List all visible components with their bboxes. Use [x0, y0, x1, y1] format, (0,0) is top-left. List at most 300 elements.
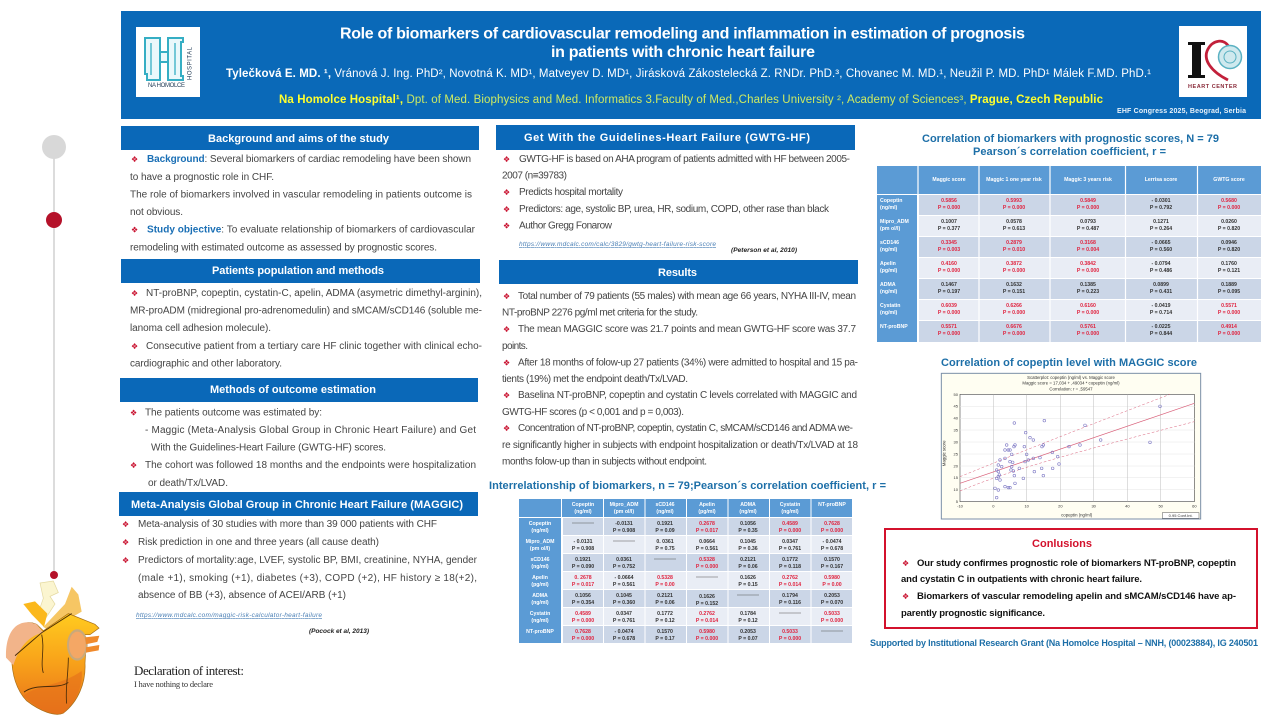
panel: results: ❖ [503, 325, 510, 334]
table: interrelationship of biomarkers: P = 0.118 [779, 564, 801, 570]
heading: results: Results [658, 267, 697, 279]
table: interrelationship of biomarkers: P = 0.00 [822, 582, 842, 588]
heading: correlation with prognostic scores: Pearson´s correlation coefficient, r = [973, 146, 1166, 158]
panel: MAGGIC: (Pocock et al, 2013) [309, 628, 369, 635]
table: interrelationship of biomarkers: P = 0.090 [572, 564, 594, 570]
table: biomarkers vs prognostic scores: - 0.0665 [1151, 240, 1171, 246]
table: biomarkers vs prognostic scores: Apelin [880, 261, 896, 267]
table: interrelationship of biomarkers: - 0.0131 [573, 539, 593, 545]
table: interrelationship of biomarkers: P = 0.09 [655, 528, 675, 534]
table: interrelationship of biomarkers: P = 0.360 [613, 600, 635, 606]
panel: patients population and methods: ❖ [131, 342, 138, 351]
table: biomarkers vs prognostic scores: P = 0.487 [1077, 226, 1099, 232]
title: in patients with chronic heart failure [551, 44, 815, 61]
table: interrelationship of biomarkers: (ng/ml) [531, 618, 549, 624]
table: biomarkers vs prognostic scores [877, 166, 1261, 342]
table: interrelationship of biomarkers: P = 0.15 [738, 582, 758, 588]
table: interrelationship of biomarkers: P = 0.908 [613, 528, 635, 534]
table: interrelationship of biomarkers: P = 0.06 [738, 564, 758, 570]
table: interrelationship of biomarkers: sCD146 [530, 557, 550, 563]
table: interrelationship of biomarkers: P = 0.017 [572, 582, 594, 588]
table: biomarkers vs prognostic scores: P = 0.197 [938, 289, 960, 295]
table: interrelationship of biomarkers: 0.5328 [657, 575, 673, 581]
heading: interrelationship of biomarkers: Interrelationship of biomarkers, n = 79;Pearson´s correlation coefficient, r = [489, 480, 886, 492]
panel: conclusions: Conlusions [1032, 538, 1092, 550]
table: biomarkers vs prognostic scores: Lerrisa score [1145, 177, 1177, 183]
table: interrelationship of biomarkers: ADMA [532, 593, 548, 599]
table: biomarkers vs prognostic scores: P = 0.000 [1218, 331, 1240, 337]
table: biomarkers vs prognostic scores: 0.5849 [1080, 198, 1096, 204]
table: interrelationship of biomarkers: 0. 0361 [656, 539, 674, 545]
table: interrelationship of biomarkers: P = 0.678 [821, 546, 843, 552]
table: interrelationship of biomarkers: 0.1056 [740, 521, 756, 527]
table: interrelationship of biomarkers: P = 0.561 [696, 546, 718, 552]
panel: results: ❖ [503, 358, 510, 368]
panel: background and aims: not obvious. [130, 207, 183, 218]
table: biomarkers vs prognostic scores: 0.1385 [1080, 282, 1096, 288]
table: biomarkers vs prognostic scores: 0.5571 [941, 324, 957, 330]
table: biomarkers vs prognostic scores: 0.3168 [1080, 240, 1096, 246]
table: interrelationship of biomarkers: Cystatin [780, 502, 800, 508]
table: biomarkers vs prognostic scores: P = 0.820 [1218, 226, 1240, 232]
heading: correlation with prognostic scores [922, 133, 1219, 158]
scatter plot: 20 [1058, 504, 1063, 509]
scatter plot: Maggic score [942, 440, 947, 466]
table: interrelationship of biomarkers: sCD146 [655, 502, 675, 508]
table: interrelationship of biomarkers: (pm ol/l) [614, 509, 634, 515]
table: biomarkers vs prognostic scores: 0.6676 [1006, 324, 1022, 330]
scatter plot [940, 372, 1202, 520]
title [340, 26, 1025, 61]
table: biomarkers vs prognostic scores: 0.1007 [941, 219, 957, 225]
scatter plot: copeptin (ng/ml) [1061, 512, 1093, 517]
panel: results: After 18 months of folow-up 27 patients (34%) were admitted to hospital and 15 pa- [518, 358, 858, 368]
heading: methods: Methods of outcome estimation [210, 384, 376, 396]
scatter plot: 0.95 Conf.Int. [1169, 513, 1193, 518]
table: biomarkers vs prognostic scores: P = 0.151 [1003, 289, 1025, 295]
table: interrelationship of biomarkers: (ng/ml) [656, 509, 674, 515]
table: biomarkers vs prognostic scores: sCD146 [880, 240, 899, 246]
table: biomarkers vs prognostic scores: P = 0.095 [1218, 289, 1240, 295]
panel: conclusions [885, 529, 1257, 628]
table: biomarkers vs prognostic scores: Maggic 3 years risk [1064, 177, 1112, 183]
icon: anatomical heart [6, 580, 100, 715]
table: interrelationship of biomarkers: P = 0.00 [655, 582, 675, 588]
scatter plot: 10 [954, 487, 959, 492]
table: biomarkers vs prognostic scores: 0.6266 [1006, 303, 1022, 309]
logo: Na Homolce Hospital [136, 27, 200, 97]
panel: conclusions: and cystatin C in outpatients with chronic heart failure. [901, 574, 1142, 585]
table: interrelationship of biomarkers: 0.5328 [699, 557, 715, 563]
heading: copeptin vs MAGGIC: Correlation of copeptin level with MAGGIC score [941, 357, 1197, 369]
panel: results: The mean MAGGIC score was 21.7 points and mean GWTG-HF score was 37.7 [518, 324, 856, 335]
table: interrelationship of biomarkers: P = 0.678 [613, 636, 635, 642]
scatter plot: 30 [954, 439, 959, 444]
table: interrelationship of biomarkers: Copeptin [572, 502, 594, 508]
table: interrelationship of biomarkers: (ng/ml) [531, 600, 549, 606]
declaration of interest [134, 663, 244, 689]
table: interrelationship of biomarkers: P = 0.354 [572, 600, 594, 606]
heading: results [499, 260, 858, 284]
heading: GWTG: Get With the Guidelines-Heart Failure (GWTG-HF) [524, 132, 810, 144]
table: biomarkers vs prognostic scores: - 0.0225 [1151, 324, 1171, 330]
table: biomarkers vs prognostic scores: 0.5761 [1080, 324, 1096, 330]
logo: Heart Center [1179, 26, 1247, 97]
table: biomarkers vs prognostic scores: P = 0.377 [938, 226, 960, 232]
table: interrelationship of biomarkers: 0.1784 [740, 611, 756, 617]
table: interrelationship of biomarkers: P = 0.152 [696, 601, 718, 607]
table: biomarkers vs prognostic scores: P = 0.000 [1003, 310, 1025, 316]
table: interrelationship of biomarkers: P = 0.014 [779, 582, 801, 588]
panel: results: Baselina NT-proBNP, copeptin and cystatin C levels correlated with MAGGIC and [518, 390, 857, 401]
table: interrelationship of biomarkers: (ng/ml) [531, 528, 549, 534]
panel: MAGGIC: https://www.mdcalc.com/maggic-risk-calculator-heart-failure [136, 612, 322, 619]
panel: GWTG-HF: Author Gregg Fonarow [519, 220, 613, 232]
table: biomarkers vs prognostic scores: P = 0.223 [1077, 289, 1099, 295]
scatter plot: 0 [992, 504, 995, 509]
table: biomarkers vs prognostic scores: (ng/ml) [880, 289, 898, 295]
table: interrelationship of biomarkers: P = 0.36 [738, 546, 758, 552]
table: interrelationship of biomarkers: 0. 2678 [574, 575, 592, 581]
table: biomarkers vs prognostic scores: 0.1760 [1221, 261, 1237, 267]
panel: patients population and methods: MR-proADM (midregional pro-adrenomedulin) and sMCAM/sCD146 (soluble me- [130, 306, 482, 316]
congress note: EHF Congress 2025, Beograd, Serbia [1117, 108, 1246, 115]
table: interrelationship of biomarkers: Mipro_ADM [526, 539, 554, 545]
panel: GWTG-HF: ❖ [503, 155, 510, 164]
table: biomarkers vs prognostic scores: Maggic score [932, 177, 966, 183]
scatter plot: 45 [954, 404, 959, 409]
table: interrelationship of biomarkers: 0.2053 [824, 593, 840, 599]
table: interrelationship of biomarkers: P = 0.000 [779, 636, 801, 642]
table: interrelationship of biomarkers: P = 0.167 [821, 564, 843, 570]
title: Role of biomarkers of cardiovascular remodeling and inflammation in estimation of prognosis [340, 26, 1025, 42]
table: biomarkers vs prognostic scores: Mipro_ADM [880, 219, 909, 225]
table: interrelationship of biomarkers: P = 0.014 [696, 618, 718, 624]
table: biomarkers vs prognostic scores: 0.6160 [1080, 303, 1096, 309]
table: interrelationship of biomarkers: 0.2121 [740, 557, 756, 563]
heading: GWTG [496, 125, 855, 150]
panel: results: GWTG-HF scores (p < 0,001 and p = 0,003). [502, 407, 684, 418]
panel: patients population and methods: ❖ [131, 289, 138, 298]
table: biomarkers vs prognostic scores: P = 0.000 [1003, 331, 1025, 337]
table: biomarkers vs prognostic scores: P = 0.003 [938, 247, 960, 253]
panel: GWTG-HF: GWTG-HF is based on AHA program of patients admitted with HF between 2005- [519, 154, 850, 165]
table: biomarkers vs prognostic scores: 0.3345 [941, 240, 957, 246]
heading: MAGGIC [119, 492, 478, 516]
table: biomarkers vs prognostic scores: P = 0.000 [938, 331, 960, 337]
table: interrelationship of biomarkers: P = 0.761 [779, 546, 801, 552]
panel: methods of outcome estimation: - Maggic (Meta-Analysis Global Group in Chronic Heart Failure) and Get [145, 425, 476, 436]
table: interrelationship of biomarkers: 0.5980 [699, 629, 715, 635]
table: biomarkers vs prognostic scores: (pm ol/l) [880, 226, 900, 232]
table: interrelationship of biomarkers: Mipro_ADM [610, 502, 638, 508]
table: biomarkers vs prognostic scores: 0.1271 [1153, 219, 1169, 225]
table: interrelationship of biomarkers: Apelin [532, 575, 548, 581]
logo: Heart Center: HEART CENTER [1188, 84, 1237, 90]
table: interrelationship of biomarkers: 0.1921 [657, 521, 673, 527]
table: biomarkers vs prognostic scores: 0.6039 [941, 303, 957, 309]
funding note: Supported by Institutional Research Grant (Na Homolce Hospital – NNH, (00023884), IG 240501 [870, 638, 1258, 648]
scatter plot: 15 [954, 475, 959, 480]
table: biomarkers vs prognostic scores: 0.1889 [1221, 282, 1237, 288]
table: interrelationship of biomarkers: - 0.0474 [614, 629, 634, 635]
table: interrelationship of biomarkers [519, 499, 852, 643]
panel: results: NT-proBNP 2276 pg/ml met criteria for the study. [502, 308, 698, 318]
table: interrelationship of biomarkers: 0.4589 [782, 521, 798, 527]
scatter plot: 40 [954, 416, 959, 421]
table: biomarkers vs prognostic scores: Copeptin [880, 198, 902, 204]
table: biomarkers vs prognostic scores: (ng/ml) [880, 205, 898, 211]
table: biomarkers vs prognostic scores: P = 0.000 [1077, 268, 1099, 274]
table: biomarkers vs prognostic scores: 0.5993 [1006, 198, 1022, 204]
table: biomarkers vs prognostic scores: P = 0.792 [1150, 205, 1172, 211]
panel: results [499, 260, 858, 468]
panel: MAGGIC: (male +1), smoking (+1), diabetes (+3), COPD (+2), HF history ≥ 18(+2), [138, 573, 477, 584]
scatter plot: Maggic score = 17,034 + ,49034 * copeptin (ng/ml) [1022, 381, 1120, 386]
panel: conclusions: ❖ [902, 559, 909, 568]
table: interrelationship of biomarkers: 0.1626 [740, 575, 756, 581]
table: interrelationship of biomarkers: 0.7628 [824, 521, 840, 527]
panel: patients population and methods: cardiographic and other laboratory. [130, 358, 282, 370]
table: interrelationship of biomarkers: 0.0361 [616, 557, 632, 563]
table: biomarkers vs prognostic scores: 0.5680 [1221, 198, 1237, 204]
scatter plot: 20 [954, 463, 959, 468]
panel: conclusions: Our study confirmes prognostic role of biomarkers NT-proBNP, copeptin [917, 558, 1236, 569]
table: biomarkers vs prognostic scores: 0.4160 [941, 261, 957, 267]
table: interrelationship of biomarkers: (pg/ml) [698, 509, 716, 515]
heading: methods [120, 378, 478, 402]
panel: MAGGIC [119, 492, 478, 635]
panel: background and aims: to have a prognostic role in CHF. [130, 172, 274, 183]
scatter plot: -10 [957, 504, 964, 509]
panel: methods of outcome estimation: The cohort was followed 18 months and the endpoints were hospitalization [145, 460, 476, 471]
table: interrelationship of biomarkers: P = 0.116 [779, 600, 801, 606]
table: interrelationship of biomarkers: 0.2762 [782, 575, 798, 581]
scatter plot: Correlation: r = ,59547 [1049, 386, 1093, 391]
table: interrelationship of biomarkers: 0.1570 [824, 557, 840, 563]
panel: background and aims: ❖ [131, 155, 138, 164]
table: interrelationship of biomarkers: Apelin [699, 502, 715, 508]
panel: MAGGIC: ❖ [122, 520, 129, 529]
table: interrelationship of biomarkers: 0.1921 [575, 557, 591, 563]
scatter plot: 25 [954, 451, 959, 456]
table: biomarkers vs prognostic scores: 0.0578 [1006, 219, 1022, 225]
table: interrelationship of biomarkers: P = 0.000 [696, 636, 718, 642]
table: biomarkers vs prognostic scores: Cystatin [880, 303, 900, 309]
table: interrelationship of biomarkers: 0.7628 [575, 629, 591, 635]
table: interrelationship of biomarkers: 0.1626 [699, 594, 715, 600]
declaration of interest: I have nothing to declare [134, 679, 213, 689]
table: biomarkers vs prognostic scores: P = 0.121 [1218, 268, 1240, 274]
panel: results: ❖ [503, 292, 510, 301]
heading: MAGGIC: Meta-Analysis Global Group in Chronic Heart Failure (MAGGIC) [131, 499, 463, 511]
panel: background and aims: Study objective: To evaluate relationship of biomarkers of cardiovascular [147, 224, 476, 236]
panel: GWTG-HF: https://www.mdcalc.com/calc/3829/gwtg-heart-failure-risk-score [519, 241, 716, 248]
table: interrelationship of biomarkers: NT-proBNP [818, 502, 846, 508]
panel: methods of outcome estimation: The patients outcome was estimated by: [145, 408, 322, 418]
heading: background [121, 126, 479, 150]
table: interrelationship of biomarkers: 0.1570 [657, 629, 673, 635]
panel: methods of outcome estimation: ❖ [130, 461, 137, 470]
table: biomarkers vs prognostic scores: GWTG score [1213, 177, 1245, 183]
table: interrelationship of biomarkers: 0.2053 [740, 629, 756, 635]
table: interrelationship of biomarkers: (ng/ml) [781, 509, 799, 515]
table: interrelationship of biomarkers: -0.0131 [615, 521, 633, 527]
table: biomarkers vs prognostic scores: (ng/ml) [880, 310, 898, 316]
panel: results: re significantly higher in subjects with endpoint hospitalization or death/Tx/LVAD at 18 [502, 440, 858, 451]
table: interrelationship of biomarkers: P = 0.000 [779, 528, 801, 534]
heading: patients [121, 259, 480, 283]
panel: methods of outcome estimation: With the Guidelines-Heart Failure (GWTG-HF) scores. [151, 442, 386, 454]
table: biomarkers vs prognostic scores: - 0.0301 [1151, 198, 1171, 204]
table: biomarkers vs prognostic scores: 0.3842 [1080, 261, 1096, 267]
table: interrelationship of biomarkers: 0.2678 [699, 521, 715, 527]
panel: background and aims: The role of biomarkers involved in vascular remodeling in patients outcome is [130, 190, 472, 200]
scatter plot: 50 [954, 392, 959, 397]
table: biomarkers vs prognostic scores: P = 0.000 [938, 205, 960, 211]
panel: GWTG-HF: (Peterson et al, 2010) [731, 247, 797, 254]
table: interrelationship of biomarkers: (ng/ml) [739, 509, 757, 515]
table: interrelationship of biomarkers: P = 0.000 [572, 618, 594, 624]
table: biomarkers vs prognostic scores: P = 0.000 [938, 268, 960, 274]
table: biomarkers vs prognostic scores: 0.4914 [1221, 324, 1237, 330]
table: biomarkers vs prognostic scores: 0.0260 [1221, 219, 1237, 225]
logo: Na Homolce Hospital: NA HOMOLCE [148, 83, 185, 89]
table: biomarkers vs prognostic scores: P = 0.000 [1077, 310, 1099, 316]
panel: GWTG-HF: Predicts hospital mortality [519, 187, 623, 198]
table: interrelationship of biomarkers: P = 0.017 [696, 528, 718, 534]
table: interrelationship of biomarkers: NT-proBNP [526, 629, 554, 635]
panel: GWTG-HF: ❖ [503, 188, 510, 197]
scatter plot: Scatterplot: copeptin (ng/ml) vs. Maggic score [1027, 375, 1115, 380]
table: interrelationship of biomarkers: P = 0.35 [738, 528, 758, 534]
table: interrelationship of biomarkers: 0.0347 [782, 539, 798, 545]
table: interrelationship of biomarkers: 0.1045 [616, 593, 632, 599]
scatter plot: 5 [956, 499, 959, 504]
table: biomarkers vs prognostic scores: 0.1632 [1006, 282, 1022, 288]
declaration of interest: Declaration of interest: [134, 663, 244, 678]
table: interrelationship of biomarkers: 0.2762 [699, 611, 715, 617]
table: interrelationship of biomarkers: P = 0.000 [821, 528, 843, 534]
panel: results: ❖ [503, 424, 510, 433]
table: interrelationship of biomarkers: P = 0.000 [821, 618, 843, 624]
scatter plot: 35 [954, 427, 959, 432]
panel: methods of outcome estimation: or death/Tx/LVAD. [148, 478, 228, 489]
panel: GWTG-HF: ❖ [503, 222, 510, 230]
table: interrelationship of biomarkers: 0.5033 [782, 629, 798, 635]
panel: results: Total number of 79 patients (55 males) with mean age 66 years, NYHA III-IV, mean [518, 291, 856, 302]
panel: results: ❖ [503, 391, 510, 400]
table: interrelationship of biomarkers: (pm ol/l) [530, 546, 550, 552]
table: interrelationship of biomarkers: 0.1772 [657, 611, 673, 617]
table: biomarkers vs prognostic scores: 0.5571 [1221, 303, 1237, 309]
panel: results: Concentration of NT-proBNP, copeptin, cystatin C, sMCAM/sCD146 and ADMA we- [518, 423, 853, 434]
table: biomarkers vs prognostic scores: NT-proBNP [880, 324, 908, 330]
panel: results: tients (19%) met the endpoint death/Tx/LVAD. [502, 374, 688, 385]
panel: MAGGIC: ❖ [122, 556, 129, 565]
table: biomarkers vs prognostic scores: P = 0.431 [1150, 289, 1172, 295]
panel: patients population and methods [121, 259, 482, 370]
table: interrelationship of biomarkers: 0.2121 [657, 593, 673, 599]
table: interrelationship of biomarkers: P = 0.12 [738, 618, 758, 624]
table: biomarkers vs prognostic scores: - 0.0794 [1151, 261, 1171, 267]
table: biomarkers vs prognostic scores: 0.1467 [941, 282, 957, 288]
table: interrelationship of biomarkers: P = 0.17 [655, 636, 675, 642]
table: biomarkers vs prognostic scores: P = 0.560 [1150, 247, 1172, 253]
panel: GWTG-HF [496, 125, 855, 254]
scatter plot: 40 [1125, 504, 1130, 509]
table: interrelationship of biomarkers: P = 0.561 [613, 582, 635, 588]
header banner [121, 11, 1261, 119]
scatter plot: 50 [1158, 504, 1164, 509]
panel: methods of outcome estimation [120, 378, 478, 489]
panel: GWTG-HF: ❖ [503, 205, 510, 214]
table: biomarkers vs prognostic scores: 0.5856 [941, 198, 957, 204]
panel: MAGGIC: absence of BB (+3), absence of ACEI/ARB (+1) [138, 590, 346, 601]
panel: background and aims: Background: Several biomarkers of cardiac remodeling have been shown [147, 154, 471, 165]
timeline decoration [42, 135, 66, 579]
table: interrelationship of biomarkers: P = 0.752 [613, 564, 635, 570]
heading: correlation with prognostic scores: Correlation of biomarkers with prognostic scores, N = 79 [922, 133, 1219, 145]
table: biomarkers vs prognostic scores: (pg/ml) [880, 268, 898, 274]
table: biomarkers vs prognostic scores: (ng/ml) [880, 247, 898, 253]
table: biomarkers vs prognostic scores: P = 0.000 [1218, 310, 1240, 316]
table: interrelationship of biomarkers: ADMA [740, 502, 756, 508]
panel: MAGGIC: Risk prediction in one and three years (all cause death) [138, 537, 379, 548]
panel: conclusions: Biomarkers of vascular remodeling apelin and sMCAM/sCD146 have ap- [917, 591, 1236, 602]
panel: MAGGIC: ❖ [122, 538, 129, 547]
panel: patients population and methods: Consecutive patient from a tertiary care HF clinic together with clinical echo- [146, 341, 482, 352]
heading: background: Background and aims of the study [208, 133, 390, 145]
table: interrelationship of biomarkers: 0.1794 [782, 593, 798, 599]
table: interrelationship of biomarkers: 0.5980 [824, 575, 840, 581]
table: interrelationship of biomarkers: 0.1056 [575, 593, 591, 599]
table: interrelationship of biomarkers: Cystatin [530, 611, 550, 617]
table: interrelationship of biomarkers: 0.1772 [782, 557, 798, 563]
table: interrelationship of biomarkers: P = 0.06 [655, 600, 675, 606]
table: biomarkers vs prognostic scores: 0.3872 [1006, 261, 1022, 267]
table: biomarkers vs prognostic scores: 0.2879 [1006, 240, 1022, 246]
table: interrelationship of biomarkers: P = 0.761 [613, 618, 635, 624]
panel: GWTG-HF: 2007 (n≡39783) [502, 170, 567, 182]
panel: GWTG-HF: Predictors: age, systolic BP, urea, HR, sodium, COPD, other rase than black [519, 204, 830, 215]
table: interrelationship of biomarkers: 0.4589 [575, 611, 591, 617]
table: biomarkers vs prognostic scores: P = 0.000 [1003, 268, 1025, 274]
panel: conclusions: ❖ [902, 592, 909, 601]
table: interrelationship of biomarkers: 0.0664 [699, 539, 715, 545]
panel: background and aims [121, 126, 479, 254]
table: biomarkers vs prognostic scores: P = 0.000 [1218, 205, 1240, 211]
table: interrelationship of biomarkers: P = 0.07 [738, 636, 758, 642]
table: biomarkers vs prognostic scores: ADMA [880, 282, 896, 288]
table: biomarkers vs prognostic scores: P = 0.820 [1218, 247, 1240, 253]
panel: MAGGIC: Meta-analysis of 30 studies with more than 39 000 patients with CHF [138, 519, 437, 530]
table: interrelationship of biomarkers: 0.1045 [740, 539, 756, 545]
table: biomarkers vs prognostic scores: P = 0.000 [938, 310, 960, 316]
table: interrelationship of biomarkers: P = 0.000 [572, 636, 594, 642]
table: interrelationship of biomarkers: P = 0.070 [821, 600, 843, 606]
panel: results: points. [502, 341, 528, 352]
affiliations: Na Homolce Hospital¹, Dpt. of Med. Biophysics and Med. Informatics 3.Faculty of Med.,Charles University ², Academy of Sciences³, Prague, Czech Republic [279, 94, 1104, 106]
table: interrelationship of biomarkers: 0.5033 [824, 611, 840, 617]
table: biomarkers vs prognostic scores: 0.0793 [1080, 219, 1096, 225]
table: biomarkers vs prognostic scores: P = 0.010 [1003, 247, 1025, 253]
panel: results: months folow-up than in subjects without endpoint. [502, 456, 707, 468]
table: biomarkers vs prognostic scores: P = 0.844 [1150, 331, 1172, 337]
table: interrelationship of biomarkers: (pg/ml) [531, 582, 549, 588]
panel: MAGGIC: Predictors of mortality:age, LVEF, systolic BP, BMI, creatinine, NYHA, gender [138, 555, 478, 566]
scatter plot: 10 [1024, 504, 1030, 509]
